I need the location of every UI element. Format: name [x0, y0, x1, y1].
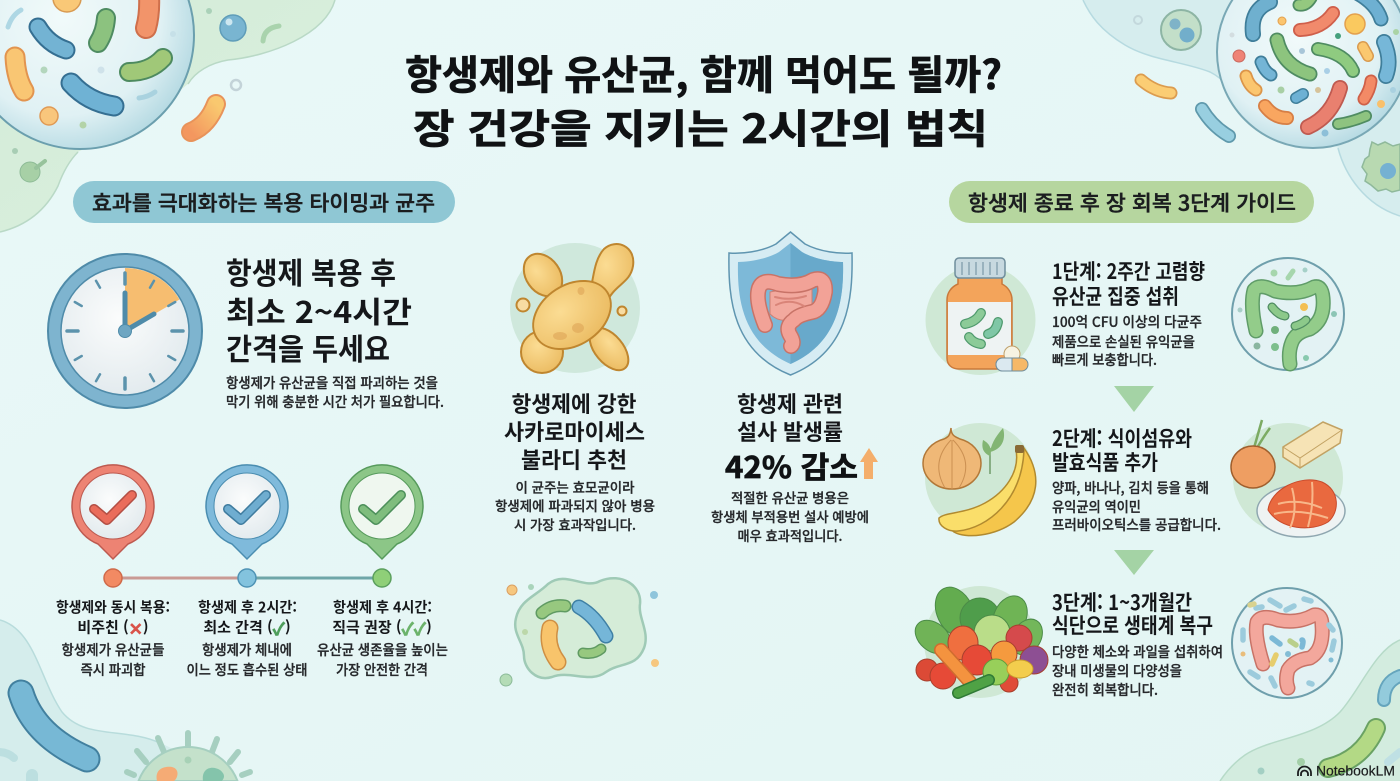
- decoration: bottom-right microbes: [1220, 640, 1400, 781]
- heading: step 1: 1단계: 2주간 고렴향: [1052, 256, 1205, 286]
- icon: clock showing the 2 to 4 hour window: [48, 254, 202, 408]
- icon: fresh vegetables and fruits: [909, 581, 1049, 698]
- text: step 1 details: 빠르게 보충합니다.: [1052, 350, 1157, 370]
- heading: step 2: 2단계: 식이섬유와: [1052, 423, 1192, 453]
- label: after 2 hours: 항생제 후 2시간:: [198, 596, 297, 618]
- heading: yeast strain: 불라디 추천: [521, 443, 627, 475]
- label: after 4 hours: 유산균 생존율을 높이는: [317, 640, 448, 660]
- text: yeast explanation: 시 가장 효과작입니다.: [514, 514, 636, 534]
- icon: probiotic bottle: [926, 258, 1036, 375]
- icon: healthy intestine in petri dish: [1232, 588, 1342, 698]
- text: step 3 details: 완전히 회복합니다.: [1052, 680, 1158, 700]
- label: simultaneous dose: 항생제와 동시 복용:: [56, 596, 170, 618]
- icon: green intestine in petri dish: [1232, 258, 1344, 370]
- arrow: step 1 to step 2: [1114, 386, 1154, 412]
- text: step 1 details: [1052, 312, 1202, 370]
- decoration: top-right microbes: [1083, 0, 1400, 216]
- text: step 3 details: 다양한 체소와 과일을 섭취하여: [1052, 642, 1223, 662]
- label: after 2 hours: [186, 596, 308, 680]
- icon: shield with intestine: [729, 232, 852, 375]
- decoration: top-left microbes: [0, 0, 335, 232]
- label: after 2 hours: 항생제가 체내에: [202, 640, 292, 660]
- heading: diarrhea incidence: [737, 387, 843, 447]
- heading: diarrhea incidence: 항생제 관련: [737, 387, 843, 419]
- section heading: timing: 효과를 극대화하는 복용 타이밍과 균주: [92, 188, 435, 218]
- icon: onion, tofu and kimchi: [1231, 420, 1345, 537]
- heading: yeast strain: 사카로마이세스: [504, 415, 645, 447]
- section heading: recovery guide: [949, 181, 1314, 223]
- text: step 2 details: 유익균의 역이민: [1052, 497, 1141, 517]
- panel: three-step recovery guide: [909, 181, 1345, 700]
- text: step 2 details: [1052, 478, 1221, 535]
- heading: step 2: 발효식품 추가: [1052, 447, 1158, 477]
- text: diarrhea explanation: 매우 효과적입니다.: [738, 525, 842, 545]
- title: 항생제와 유산균, 함께 먹어도 될까?: [405, 43, 1002, 101]
- label: simultaneous dose: [56, 596, 170, 680]
- text: diarrhea explanation: 적절한 유산균 병용은: [731, 487, 849, 507]
- heading: diarrhea incidence: 설사 발생률: [737, 415, 843, 447]
- text: step 2 details: 프러바이오틱스를 공급합니다.: [1052, 515, 1221, 535]
- text: step 3 details: [1052, 642, 1223, 700]
- text: yeast explanation: [495, 476, 655, 534]
- text: step 2 details: 양파, 바나나, 김치 등을 통해: [1052, 478, 1209, 498]
- label: after 4 hours: [317, 596, 448, 680]
- heading: step 1: 유산균 집중 섭취: [1052, 281, 1179, 311]
- text: reason for the interval: 막기 위해 충분한 시간 처가 필요합니다.: [226, 392, 444, 412]
- label: simultaneous dose: 비주친 (✕): [77, 614, 149, 640]
- text: step 3 details: 장내 미생물의 다양성을: [1052, 661, 1182, 681]
- title: 장 건강을 지키는 2시간의 법칙: [413, 97, 988, 155]
- icon: yeast cell: [510, 243, 640, 377]
- label: after 2 hours: 최소 간격 (✓): [203, 614, 291, 640]
- arrow: step 2 to step 3: [1114, 550, 1154, 575]
- text: reason for the interval: [226, 373, 444, 412]
- heading: step 1: [1052, 256, 1205, 311]
- illustration: microbe blob: [500, 578, 659, 686]
- marker: simultaneous dose: [72, 465, 154, 587]
- label: after 4 hours: 직극 권장 (✓✓): [332, 614, 432, 640]
- label: after 2 hours: 이느 정도 흡수된 상태: [186, 660, 308, 680]
- step 3: [909, 581, 1342, 700]
- watermark: NotebookLM: NotebookLM: [1316, 764, 1395, 778]
- step 1: [926, 256, 1344, 375]
- key message: time interval: 최소 2~4시간: [226, 288, 412, 332]
- heading: step 3: 식단으로 생태계 복구: [1052, 610, 1213, 640]
- key message: time interval: [226, 249, 412, 369]
- key message: time interval: 항생제 복용 후: [226, 249, 396, 293]
- section heading: recovery guide: 항생제 종료 후 장 회복 3단계 가이드: [968, 188, 1296, 218]
- timeline: three dosing intervals: [56, 465, 448, 680]
- heading: step 2: [1052, 423, 1192, 477]
- statistic: 42 percent reduction: 42% 감소: [725, 443, 858, 487]
- title: [405, 43, 1002, 155]
- panel: timing and strain: [48, 181, 455, 680]
- label: simultaneous dose: 항생제가 유산균들: [62, 640, 165, 660]
- text: diarrhea explanation: 항생체 부적용번 설사 예방에: [711, 506, 869, 526]
- panel: diarrhea reduction: [711, 232, 878, 545]
- panel: yeast recommendation: [495, 243, 659, 686]
- icon: onion, leaf and banana: [923, 423, 1036, 536]
- text: yeast explanation: 이 균주는 효모균이라: [516, 476, 635, 496]
- heading: step 3: 3단계: 1~3개월간: [1052, 587, 1192, 617]
- text: yeast explanation: 항생제에 파과되지 않아 병용: [495, 495, 655, 515]
- key message: time interval: 간격을 두세요: [226, 325, 390, 369]
- step 2: [923, 420, 1345, 537]
- label: simultaneous dose: 즉시 파괴합: [80, 660, 146, 680]
- label: after 4 hours: 가장 안전한 간격: [336, 660, 428, 680]
- text: step 1 details: 제품으로 손실된 유익균을: [1052, 332, 1195, 352]
- text: reason for the interval: 항생제가 유산균을 직접 파괴하는 것을: [226, 373, 438, 393]
- label: after 4 hours: 항생제 후 4시간:: [333, 596, 432, 618]
- text: step 1 details: 100억 CFU 이상의 다균주: [1052, 312, 1202, 332]
- decoration: bottom-left microbes: [0, 620, 250, 781]
- heading: step 3: [1052, 587, 1213, 640]
- text: diarrhea explanation: [711, 487, 869, 545]
- heading: yeast strain: [504, 387, 645, 475]
- marker: after 2 hours: [206, 465, 288, 587]
- heading: yeast strain: 항생제에 강한: [512, 387, 636, 419]
- marker: after 4 hours: [341, 465, 423, 587]
- section heading: timing: [73, 181, 455, 223]
